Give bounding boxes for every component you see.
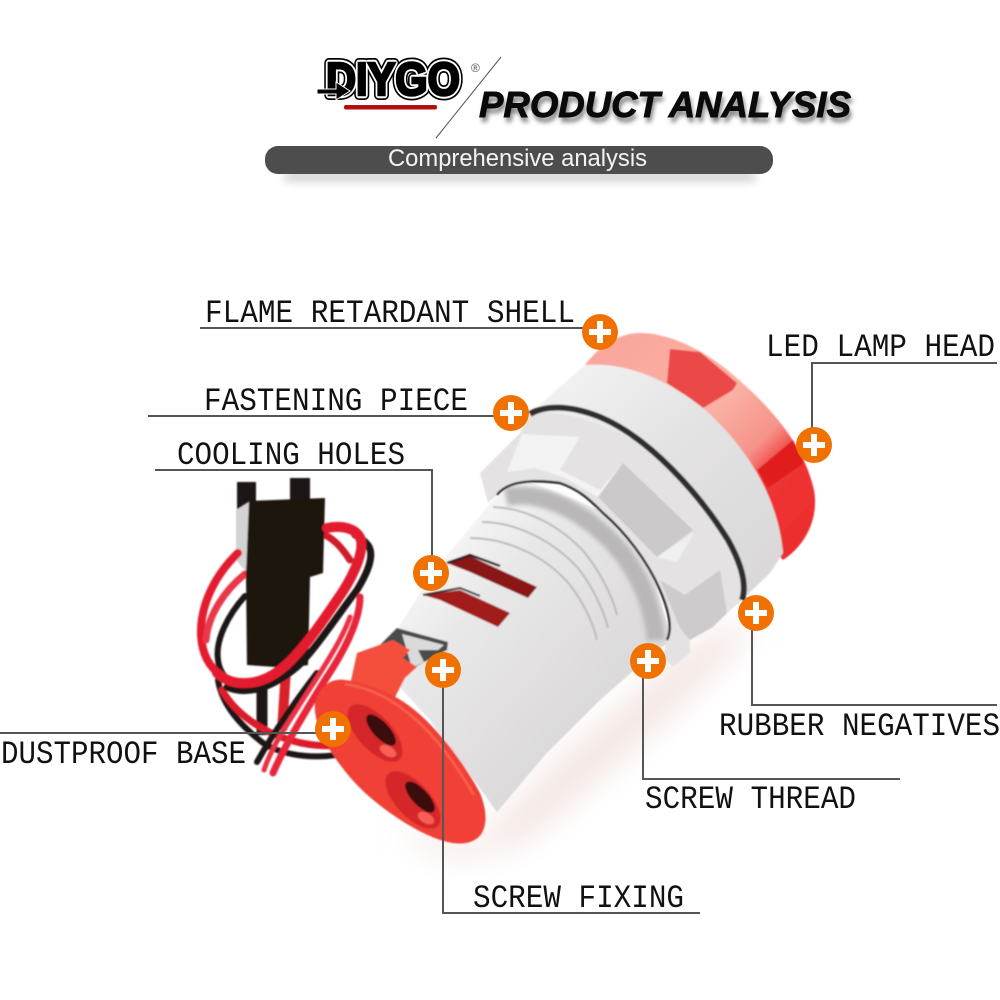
marker: cooling holes xyxy=(413,555,449,591)
red main wire xyxy=(217,527,361,683)
black main wire xyxy=(227,535,371,691)
label: dustproof base: DUSTPROOF BASE xyxy=(1,736,246,773)
product photo illustration xyxy=(201,333,815,855)
back lower red wire xyxy=(222,690,345,746)
groove line xyxy=(497,481,670,640)
marker: screw thread xyxy=(630,643,666,679)
upper back wire xyxy=(325,535,350,560)
fastening collar xyxy=(480,413,744,667)
hole one xyxy=(338,695,412,771)
marker: dustproof base xyxy=(315,711,351,747)
marker: flame retardant shell xyxy=(582,314,618,350)
subtitle pill xyxy=(265,145,773,180)
collar highlight xyxy=(507,434,623,497)
connector side xyxy=(236,502,249,575)
label: fastening piece: FASTENING PIECE xyxy=(204,383,468,420)
connector body xyxy=(246,498,325,668)
logo: DIYGO: ® xyxy=(471,61,480,75)
metal terminal slot xyxy=(377,628,448,670)
crossing black wire xyxy=(257,673,317,762)
thread ridges xyxy=(470,507,617,640)
flange xyxy=(520,365,783,597)
leader lines xyxy=(0,328,997,913)
label: screw fixing: SCREW FIXING xyxy=(473,880,684,917)
marker: screw fixing xyxy=(425,652,461,688)
marker: led lamp head xyxy=(796,427,832,463)
label: cooling holes: COOLING HOLES xyxy=(177,437,405,474)
label: screw thread: SCREW THREAD xyxy=(645,781,856,818)
connector and wires xyxy=(201,478,371,773)
cooling holes xyxy=(423,555,537,627)
label: flame retardant shell: FLAME RETARDANT SHELL xyxy=(205,295,575,332)
logo: DIYGO: DIYGO xyxy=(326,53,460,105)
connector pins xyxy=(237,478,310,523)
collar notch panel xyxy=(598,463,693,557)
thread band xyxy=(506,496,656,640)
inner black loop xyxy=(218,596,245,682)
soft shadow xyxy=(400,620,760,855)
crossing red wires xyxy=(273,597,360,773)
logo: DIYGO: DIYGO xyxy=(326,53,460,105)
collar notch highlight xyxy=(657,532,694,562)
rubber o-ring xyxy=(530,408,744,600)
marker: rubber negatives xyxy=(738,595,774,631)
lens xyxy=(585,333,815,560)
wire tails below connector xyxy=(256,688,268,735)
logo: DIYGO: DIYGO xyxy=(326,53,460,105)
header xyxy=(265,53,853,180)
hole two xyxy=(376,762,450,838)
marker: fastening piece xyxy=(493,395,529,431)
lens highlight xyxy=(667,349,737,408)
subtitle pill: Comprehensive analysis xyxy=(388,145,647,172)
heading shadow: PRODUCT ANALYSIS xyxy=(481,89,853,130)
thread body xyxy=(375,478,672,812)
slash divider xyxy=(436,57,501,138)
dustproof base xyxy=(315,640,486,844)
red left loops xyxy=(201,553,238,676)
collar lower tab xyxy=(660,570,727,640)
heading: product analysis: PRODUCT ANALYSIS xyxy=(479,84,851,125)
lens red band xyxy=(757,440,804,488)
back lower black wire xyxy=(218,680,352,756)
